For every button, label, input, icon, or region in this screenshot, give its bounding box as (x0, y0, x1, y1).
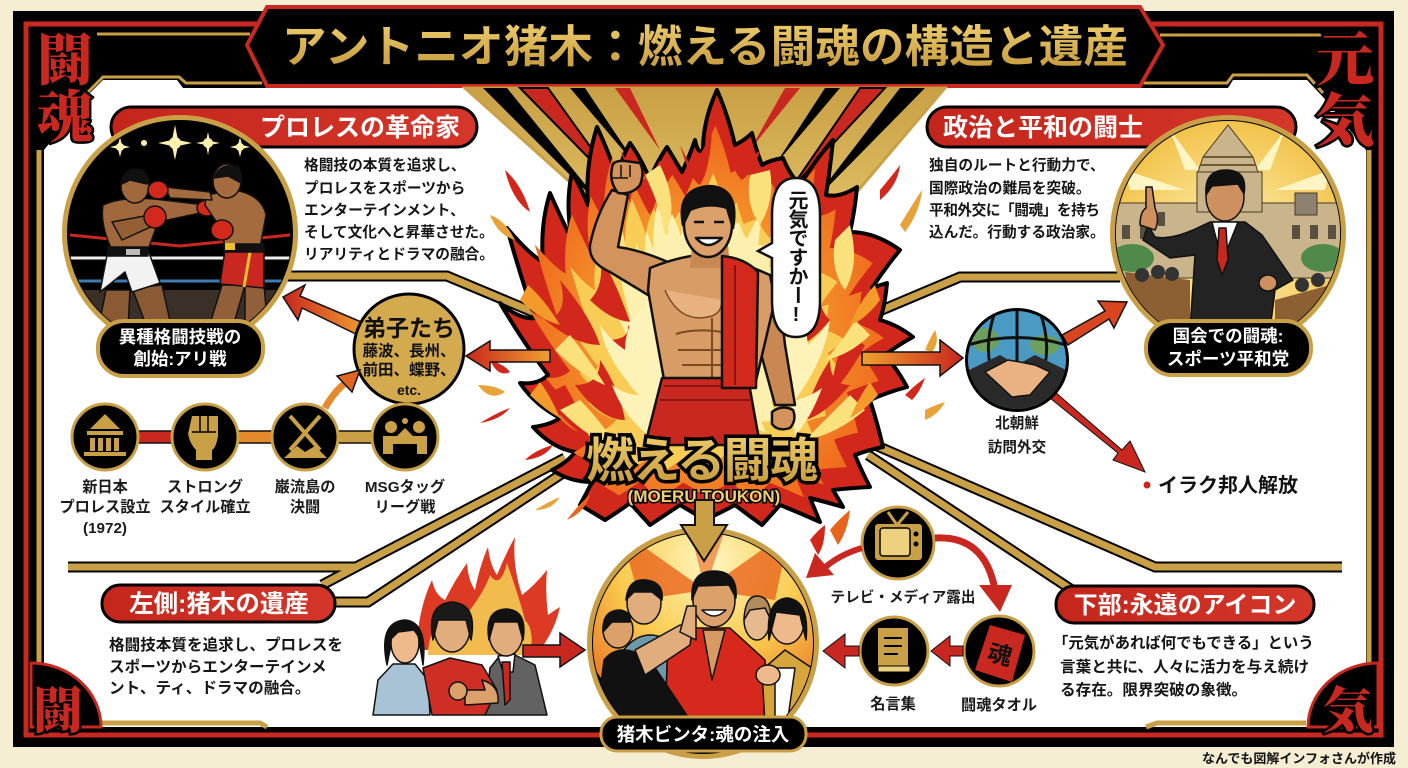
text block: 下部: 「元気があれば何でもできる」という (1053, 633, 1314, 652)
text block: 政治: 独自のルートと行動力で、 (929, 156, 1105, 174)
gold connector lines (68, 276, 1342, 602)
text block: 左側 (109, 635, 343, 697)
speech bubble: 元気ですかー! (785, 190, 808, 326)
speech bubble (758, 178, 820, 337)
timeline labels: リーグ戦 (375, 498, 435, 516)
heading: 政治と平和の闘士 (927, 107, 1296, 147)
text block: 政治: 平和外交に「闘魂」を持ち (929, 201, 1100, 219)
heading: 下部 (1056, 586, 1314, 623)
icon: towel: 魂 (985, 639, 1015, 672)
corner kanji: bottom right: 気 (1323, 683, 1373, 739)
bullet: イラク邦人解放: イラク邦人解放 (1158, 474, 1298, 497)
corner kanji: bottom left (31, 663, 101, 739)
title banner (247, 7, 1163, 86)
text block: 下部: る存在。限界突破の象徴。 (1060, 680, 1247, 699)
caption: 国会: スポーツ平和党 (1167, 349, 1289, 369)
panel: boxing circle (62, 115, 298, 326)
timeline connector (130, 431, 380, 443)
central figure: Inoki (590, 161, 795, 445)
heading: プロレスの革命家 (111, 107, 477, 147)
sun rays behind flames (465, 88, 945, 310)
globe label: 北朝鮮 (995, 414, 1039, 432)
text block: 下部 (1053, 633, 1314, 699)
icon: TV (862, 507, 934, 579)
caption: アリ戦 (98, 321, 263, 376)
corner kanji: top left (37, 31, 94, 150)
arrow: to boxing (283, 285, 366, 336)
disciples circle: 前田、蝶野、 (362, 360, 456, 379)
disciples circle: 弟子たち (363, 315, 455, 341)
title banner: アントニオ猪木：燃える闘魂の構造と遺産 (282, 23, 1128, 72)
globe label: 訪問外交 (988, 439, 1047, 456)
text block: 左側: スポーツからエンターテインメ (109, 658, 327, 676)
arrow: TV to towel (935, 538, 1012, 612)
caption: 猪木ビンタ (601, 717, 806, 751)
timeline labels: 新日本 (82, 479, 128, 496)
heading: 左側 (102, 585, 335, 622)
arrow: towel to book (931, 636, 963, 666)
timeline labels: MSGタッグ (365, 478, 445, 496)
text block: 左側: ント、ティ、ドラマの融合。 (109, 679, 310, 697)
central slogan: 燃える闘魂 (586, 435, 818, 488)
text block: 政治: 込んだ。行動する政治家。 (929, 223, 1105, 241)
caption: 国会: 国会での闘魂: (1173, 326, 1283, 346)
arrow: book to circle (823, 634, 859, 668)
text block: 政治 (929, 156, 1105, 241)
arrow: timeline to disciples (325, 370, 360, 408)
arrow: globe to iraq (1050, 392, 1145, 472)
corner kanji: top right: 元 (1316, 28, 1374, 93)
pale glow beside the torso (600, 290, 830, 440)
timeline labels (59, 478, 445, 537)
corner kanji: bottom left: 闘 (33, 683, 83, 739)
towel label: 闘魂タオル (961, 697, 1037, 714)
timeline labels: (1972) (83, 520, 127, 537)
text block: プロレスの革命家: プロレスをスポーツから (304, 180, 465, 197)
disciples circle: 藤波、長州、 (362, 342, 456, 360)
timeline icon: fist (172, 404, 238, 470)
arrow: globe to parliament (1062, 301, 1127, 345)
arrow: to globe (862, 340, 963, 376)
timeline labels: 巌流島の (275, 478, 335, 496)
boxer left (98, 169, 217, 330)
timeline icon: crossed swords (272, 404, 338, 470)
icon: towel (964, 616, 1034, 686)
heading: プロレスの革命家: プロレスの革命家 (260, 114, 460, 142)
corner kanji: top left: 魂 (37, 88, 94, 150)
globe label (988, 414, 1047, 456)
central flames (500, 90, 913, 525)
heading: 左側: 左側:猪木の遺産 (129, 590, 309, 618)
caption: 国会 (1146, 321, 1311, 375)
timeline icon: tag team (372, 404, 438, 470)
text block: プロレスの革命家: 格闘技の本質を追求し、 (304, 156, 466, 174)
red licks, left side (545, 130, 865, 440)
text block: 下部: 言葉と共に、人々に活力を与え続け (1060, 658, 1309, 676)
corner kanji: bottom right (1308, 663, 1378, 739)
text block: プロレスの革命家: そして文化へと昇華させた。 (304, 223, 494, 241)
spotlights (110, 125, 250, 160)
TV label: テレビ・メディア露出 (831, 588, 975, 606)
arrow: to disciples (466, 341, 550, 371)
timeline icon: 新日本 (72, 404, 138, 470)
caption: アリ戦: 創始:アリ戦 (133, 349, 227, 369)
boxer right (148, 164, 268, 330)
arrow: down gold (681, 500, 727, 561)
arrow: TV to circle (806, 548, 862, 578)
heading: 政治と平和の闘士: 政治と平和の闘士 (943, 114, 1143, 142)
icon: globe handshake (965, 308, 1070, 415)
panel: parliament circle (1110, 115, 1346, 326)
icon: book (860, 617, 928, 685)
yellow licks (555, 165, 870, 450)
text block: プロレスの革命家: エンターテインメント、 (304, 202, 465, 219)
corner kanji: top left: 闘 (37, 31, 93, 93)
corner kanji: top right (1316, 28, 1374, 154)
timeline labels: 決闘 (290, 498, 320, 516)
timeline labels: ストロング (167, 478, 243, 496)
arrow: fans to circle (523, 633, 585, 667)
text block: プロレスの革命家 (304, 156, 494, 263)
footer credit: なんでも図解インフォさんが作成 (1202, 751, 1396, 766)
book label: 名言集 (870, 695, 916, 713)
panel: Inoki slap circle (587, 528, 819, 759)
caption: アリ戦: 異種格闘技戦の (119, 327, 241, 347)
text block: 政治: 国際政治の難局を突破。 (929, 179, 1091, 197)
embers (478, 165, 945, 555)
illustration: fans with flame (373, 537, 560, 715)
timeline labels: プロレス設立 (59, 499, 151, 516)
disciples circle: etc. (397, 382, 421, 398)
disciples circle (354, 294, 464, 404)
corner kanji: top right: 気 (1316, 89, 1374, 154)
text block: プロレスの革命家: リアリティとドラマの融合。 (304, 246, 494, 263)
timeline labels: スタイル確立 (159, 498, 251, 516)
heading: 下部: 下部:永遠のアイコン (1074, 592, 1296, 619)
text block: 左側: 格闘技本質を追求し、プロレスを (109, 635, 343, 654)
caption: 猪木ビンタ: 猪木ビンタ:魂の注入 (617, 724, 790, 745)
central slogan: (MOERU TOUKON) (628, 487, 780, 506)
orange spark dots (520, 285, 880, 418)
